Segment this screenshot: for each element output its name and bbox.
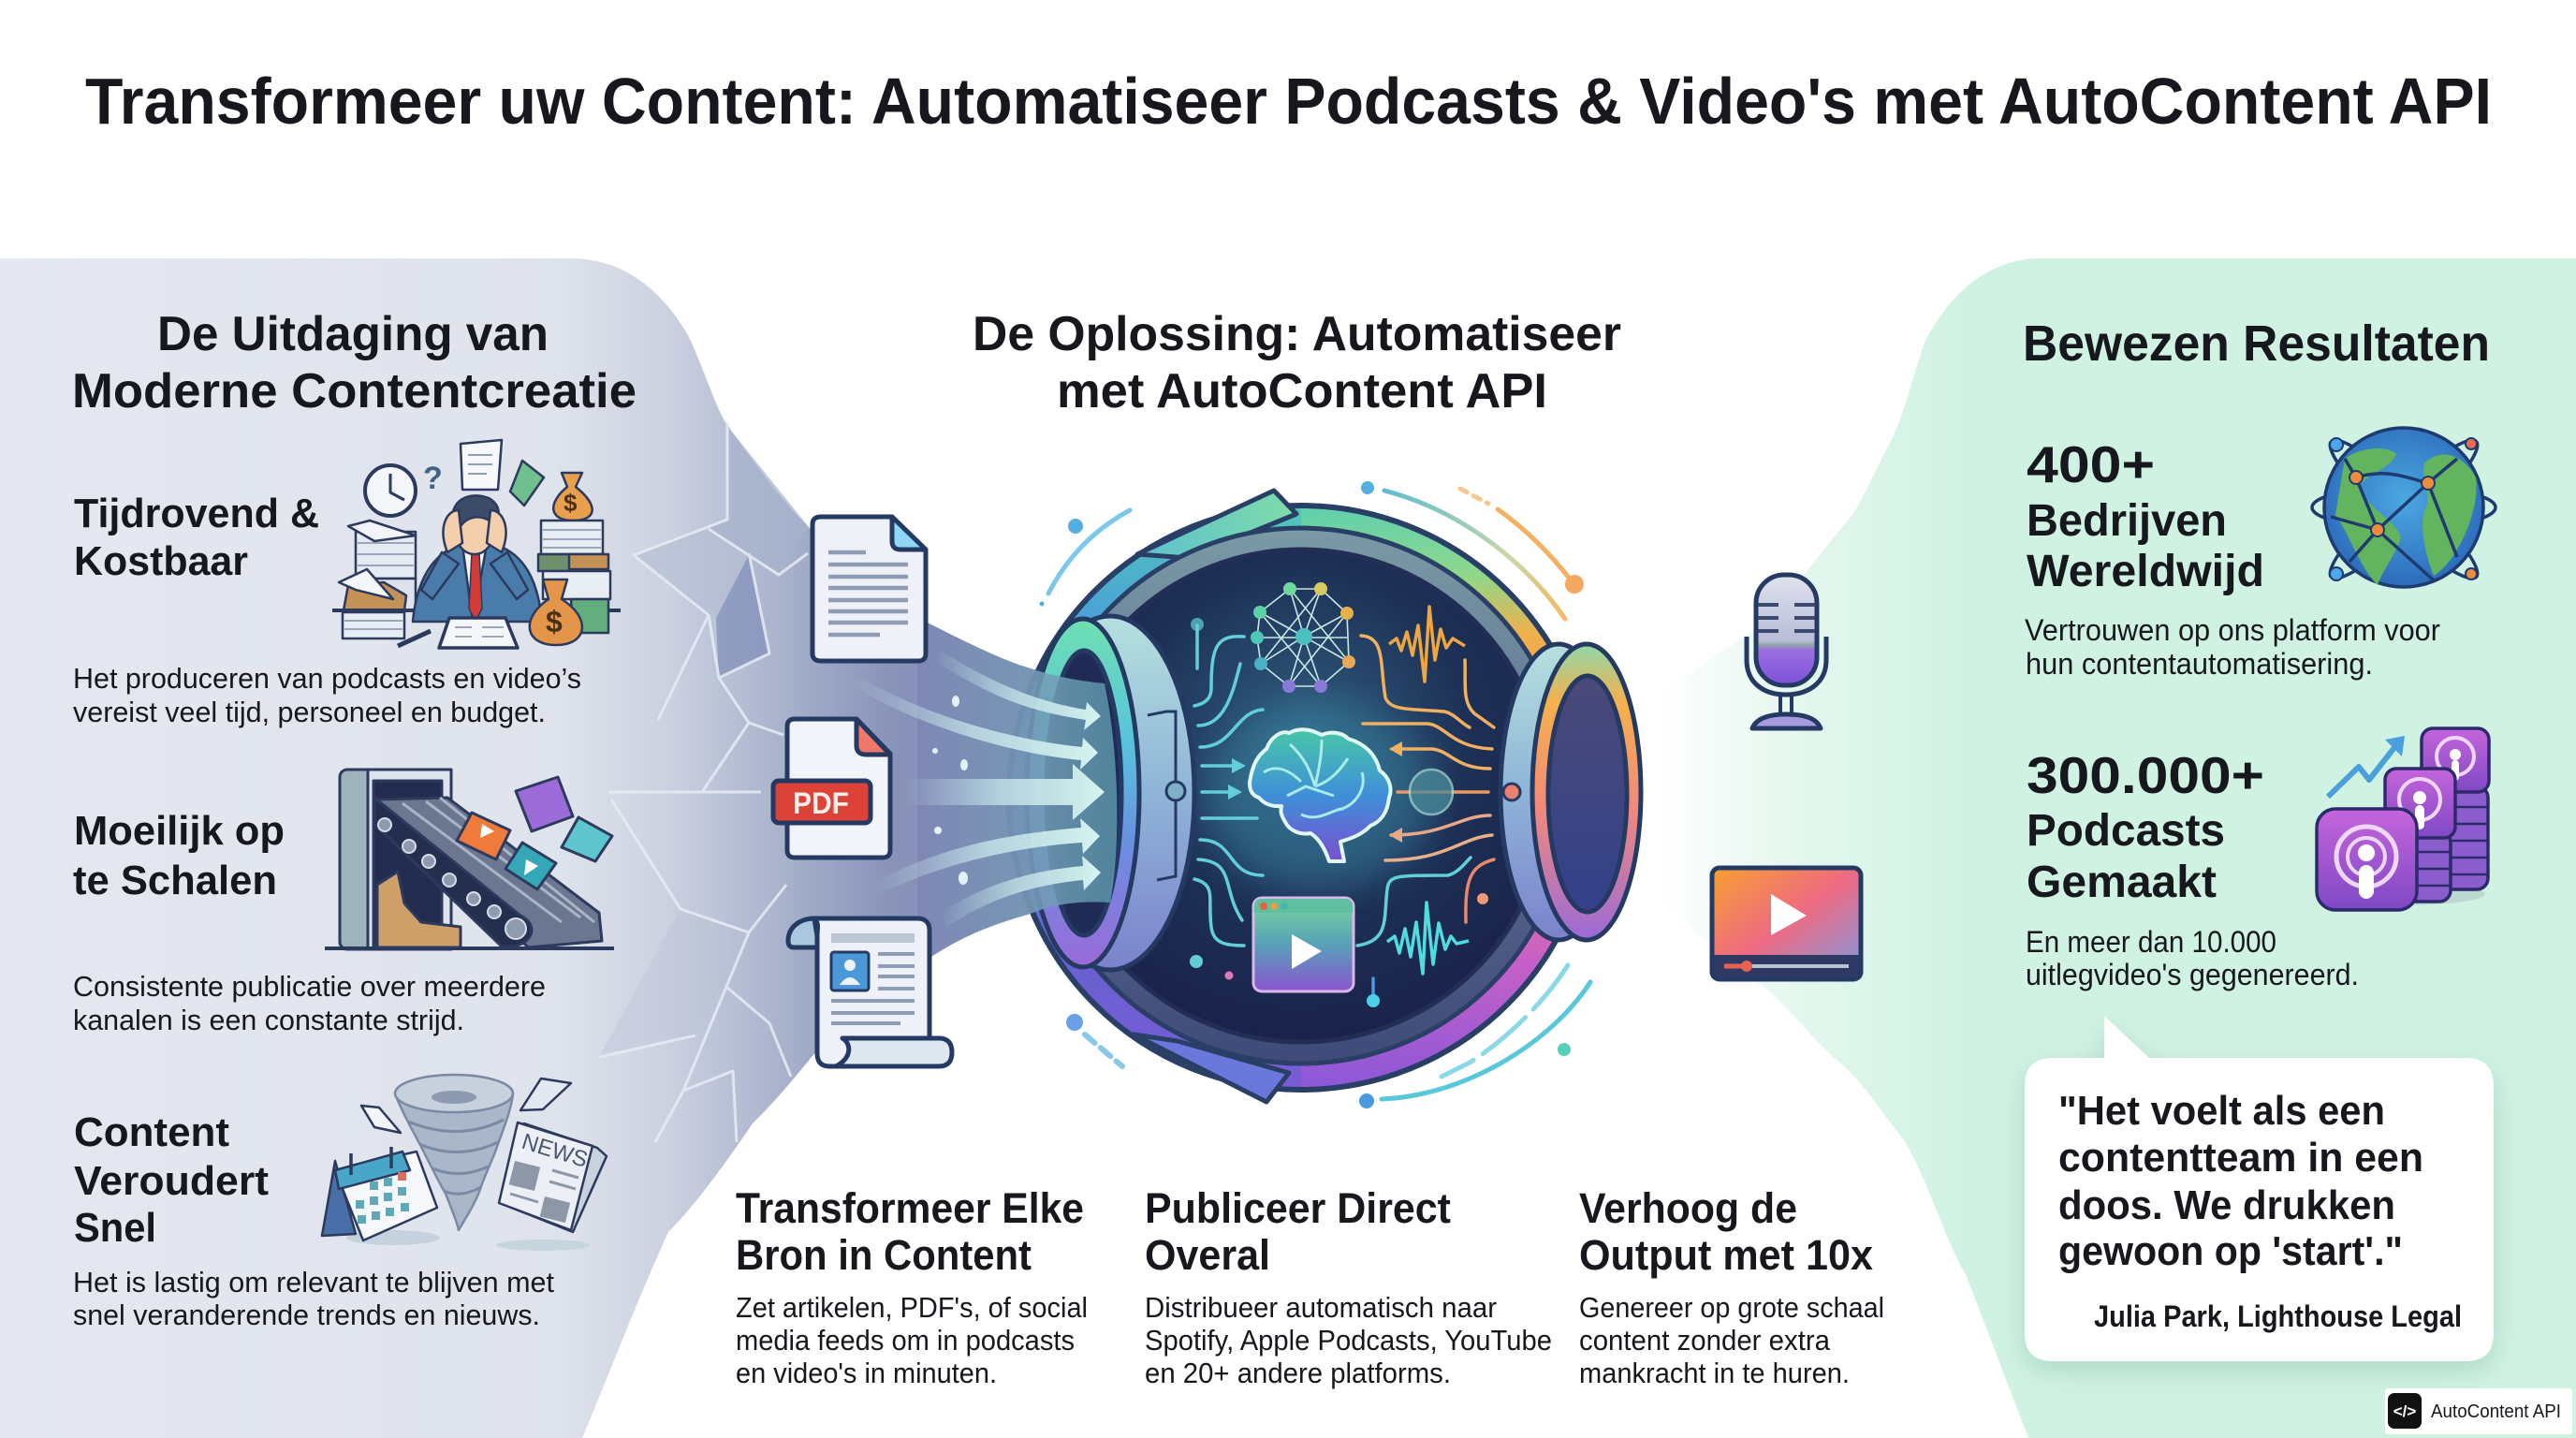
icon: stressed worker: ? bbox=[423, 461, 443, 496]
title: Transformeer uw Content: Automatiseer Podcasts & Video's met AutoContent API bbox=[85, 65, 2492, 138]
column: increase output: content zonder extra bbox=[1579, 1324, 1831, 1357]
stat: podcasts: Podcasts bbox=[2027, 806, 2225, 856]
icon: video player bbox=[1712, 868, 1861, 979]
text block: content ages: Het is lastig om relevant te blijven met bbox=[73, 1266, 554, 1299]
icon: tornado with calendar and news bbox=[322, 1075, 607, 1251]
icon: stressed worker: $ bbox=[546, 605, 563, 638]
shattered funnel facets bbox=[599, 422, 809, 1142]
column: publish everywhere: Spotify, Apple Podcasts, YouTube bbox=[1145, 1324, 1552, 1357]
icon: PDF document: PDF bbox=[793, 786, 849, 820]
text block: hard to scale bbox=[73, 808, 546, 1036]
text block: hard to scale: kanalen is een constante strijd. bbox=[73, 1004, 464, 1036]
audio wave teal bbox=[1387, 902, 1469, 974]
text block: time consuming: Het produceren van podcasts en video’s bbox=[73, 662, 581, 695]
column: transform any source bbox=[736, 1184, 1088, 1389]
callout: testimonial bbox=[2025, 1016, 2494, 1361]
text block: time consuming bbox=[73, 491, 581, 728]
icon: conveyor belt bbox=[325, 770, 614, 949]
text block: hard to scale: Consistente publicatie over meerdere bbox=[73, 970, 546, 1003]
video window bbox=[1253, 898, 1354, 991]
heading: solution bbox=[973, 307, 1621, 418]
stat: companies: Bedrijven bbox=[2027, 496, 2227, 546]
column: increase output: Verhoog de bbox=[1579, 1184, 1797, 1232]
stat: companies: 400+ bbox=[2027, 435, 2155, 493]
stat: podcasts bbox=[2026, 746, 2359, 991]
stat: companies bbox=[2025, 435, 2440, 681]
stat: podcasts: Gemaakt bbox=[2027, 858, 2217, 907]
text block: content ages: snel veranderende trends en nieuws. bbox=[73, 1299, 540, 1331]
badge: AutoContent API: </> bbox=[2393, 1402, 2416, 1420]
column: transform any source: media feeds om in podcasts bbox=[736, 1324, 1075, 1357]
column: increase output: Output met 10x bbox=[1579, 1231, 1873, 1279]
icon: microphone bbox=[1747, 575, 1826, 728]
stat: companies: Wereldwijd bbox=[2027, 547, 2264, 596]
text block: content ages: Content bbox=[74, 1109, 229, 1155]
orange nodes bbox=[1389, 741, 1488, 904]
column: publish everywhere: Publiceer Direct bbox=[1145, 1184, 1451, 1232]
heading: solution: De Oplossing: Automatiseer bbox=[973, 307, 1621, 361]
outer coloured ring bbox=[1009, 506, 1593, 1090]
flow arrows bbox=[851, 651, 1105, 927]
column: transform any source: Bron in Content bbox=[736, 1231, 1032, 1279]
text block: time consuming: vereist veel tijd, personeel en budget. bbox=[73, 696, 546, 728]
right ring bbox=[1500, 644, 1641, 940]
audio wave orange bbox=[1389, 607, 1465, 682]
text block: content ages bbox=[73, 1109, 554, 1331]
text block: content ages: Snel bbox=[74, 1205, 156, 1251]
badge: AutoContent API: AutoContent API bbox=[2431, 1401, 2561, 1422]
callout: testimonial: "Het voelt als een bbox=[2058, 1088, 2385, 1134]
text block: hard to scale: te Schalen bbox=[73, 858, 277, 903]
text block: content ages: Veroudert bbox=[74, 1158, 269, 1204]
grey inner band bbox=[1033, 528, 1569, 1064]
icon: globe network bbox=[2312, 428, 2496, 591]
column: increase output: Genereer op grote schaal bbox=[1579, 1291, 1884, 1324]
stat: podcasts: 300.000+ bbox=[2027, 746, 2264, 804]
column: publish everywhere: Distribueer automatisch naar bbox=[1145, 1291, 1497, 1324]
outer decorative arcs bbox=[1039, 481, 1590, 1108]
heading: results: Bewezen Resultaten bbox=[2023, 315, 2490, 372]
dark screen bbox=[1055, 550, 1547, 1042]
neural network bbox=[1251, 582, 1355, 693]
icon: PDF document bbox=[773, 719, 890, 858]
ring tab top bbox=[1137, 491, 1296, 558]
badge: AutoContent API bbox=[2385, 1388, 2572, 1434]
callout: testimonial: contentteam in een bbox=[2058, 1135, 2423, 1181]
icon: article scroll bbox=[788, 918, 952, 1066]
stat: companies: hun contentautomatisering. bbox=[2026, 647, 2373, 681]
glow behind brain bbox=[1208, 702, 1432, 889]
eye sensor bbox=[1410, 770, 1453, 814]
left ring bbox=[1026, 616, 1194, 970]
text block: hard to scale: Moeilijk op bbox=[74, 808, 285, 854]
callout: testimonial: doos. We drukken bbox=[2058, 1182, 2395, 1228]
text block: time consuming: Kostbaar bbox=[74, 538, 248, 584]
column: publish everywhere bbox=[1145, 1184, 1552, 1389]
circuit lines orange bbox=[1361, 636, 1494, 922]
stat: podcasts: uitlegvideo's gegenereerd. bbox=[2026, 958, 2359, 991]
circuit lines teal bbox=[1194, 625, 1471, 1001]
column: transform any source: Zet artikelen, PDF's, of social bbox=[736, 1291, 1088, 1324]
icon: podcast stacks bbox=[2317, 728, 2489, 910]
circuit arrowheads and nodes bbox=[1190, 618, 1380, 1007]
column: publish everywhere: en 20+ andere platforms. bbox=[1145, 1357, 1451, 1389]
heading: challenge: Moderne Contentcreatie bbox=[72, 364, 637, 418]
ring tab bottom bbox=[1134, 1034, 1289, 1102]
input stream into ring bbox=[917, 618, 1117, 964]
central engine bbox=[1009, 481, 1641, 1108]
icon: tornado with calendar and news: NEWS bbox=[519, 1129, 591, 1173]
heading: challenge bbox=[72, 307, 637, 418]
stat: companies: Vertrouwen op ons platform voor bbox=[2025, 613, 2440, 647]
icon: text document bbox=[812, 517, 926, 661]
callout: testimonial: Julia Park, Lighthouse Legal bbox=[2094, 1299, 2462, 1333]
column: publish everywhere: Overal bbox=[1145, 1231, 1270, 1279]
column: increase output bbox=[1579, 1184, 1884, 1389]
text block: time consuming: Tijdrovend & bbox=[74, 491, 319, 536]
heading: solution: met AutoContent API bbox=[1057, 364, 1547, 418]
brain bbox=[1250, 729, 1391, 861]
callout: testimonial: gewoon op 'start'." bbox=[2058, 1228, 2403, 1274]
icon: stressed worker: $ bbox=[564, 489, 578, 517]
column: increase output: mankracht in te huren. bbox=[1579, 1357, 1850, 1389]
column: transform any source: en video's in minuten. bbox=[736, 1357, 997, 1389]
icon: stressed worker bbox=[332, 440, 621, 648]
column: transform any source: Transformeer Elke bbox=[736, 1184, 1084, 1232]
stat: podcasts: En meer dan 10.000 bbox=[2026, 925, 2276, 959]
panel: challenges background bbox=[0, 258, 1114, 1438]
heading: challenge: De Uitdaging van bbox=[157, 307, 549, 361]
panel: results background bbox=[1657, 258, 2576, 1438]
